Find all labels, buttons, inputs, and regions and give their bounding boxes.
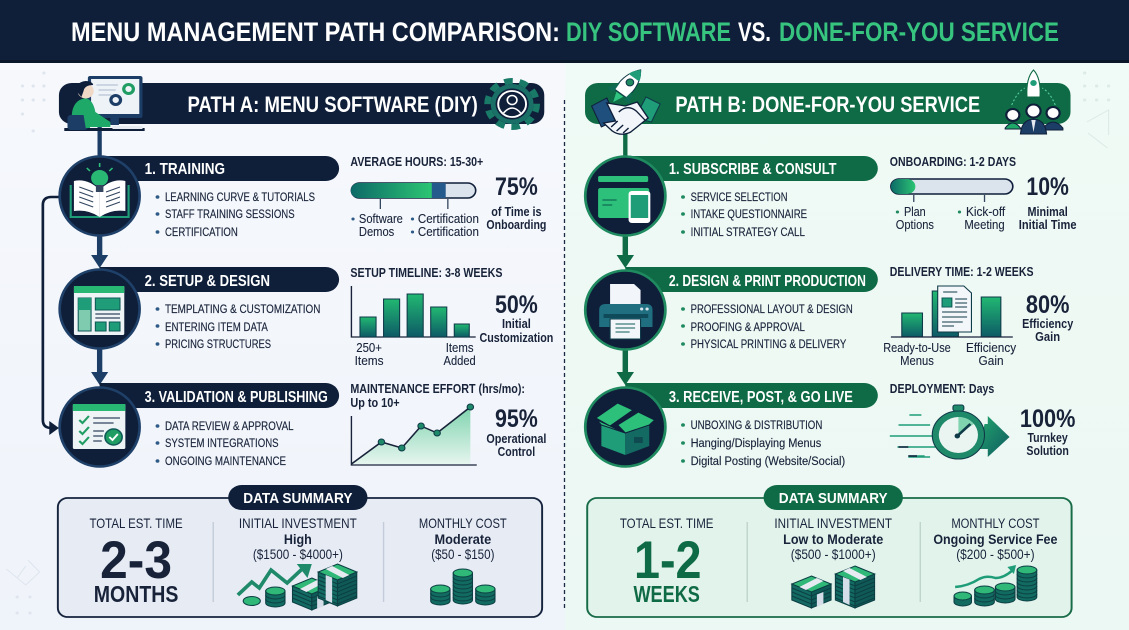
step B1: subscribe and consult	[585, 156, 878, 239]
step A2: setup and design: 2. SETUP & DESIGN	[145, 272, 270, 290]
list: production items: PHYSICAL PRINTING & DELIVERY	[691, 337, 847, 351]
stat: 50 percent: Initial	[502, 316, 531, 331]
path B banner	[585, 83, 1071, 124]
title bar: DONE-FOR-YOU SERVICE	[779, 17, 1059, 47]
list: subscribe items: SERVICE SELECTION	[691, 190, 787, 204]
icon: page template	[74, 286, 124, 335]
step A3: validation and publishing: 3. VALIDATION & PUBLISHING	[145, 388, 328, 406]
chart: average hours progress bar	[350, 154, 483, 239]
chart: setup timeline bars: Items	[446, 340, 474, 355]
list: go-live items: Digital Posting (Website/Social)	[691, 454, 845, 468]
panel: Path B	[585, 62, 1077, 617]
list: setup items: PRICING STRUCTURES	[165, 337, 271, 351]
stat: 95 percent: Operational	[486, 431, 546, 446]
panel: Path A	[43, 76, 553, 617]
chart: average hours progress bar: Certification	[418, 211, 479, 226]
step B1: subscribe and consult: 1. SUBSCRIBE & CONSULT	[669, 160, 837, 178]
stat: 95 percent	[486, 406, 546, 459]
stat: 95 percent: Control	[498, 444, 535, 459]
list: validation items: SYSTEM INTEGRATIONS	[165, 436, 279, 450]
stat: 50 percent	[479, 292, 553, 345]
summary: total time: TOTAL EST. TIME	[89, 516, 183, 532]
chart: setup timeline bars: SETUP TIMELINE: 3-8 WEEKS	[350, 265, 502, 280]
stat: 75 percent: 75%	[495, 174, 538, 201]
stat: 75 percent: of Time is	[491, 204, 542, 219]
icon: handshake	[592, 97, 660, 134]
chart: setup timeline bars	[350, 265, 502, 368]
summary: initial investment: INITIAL INVESTMENT	[239, 516, 357, 532]
icon: card and phone	[598, 176, 650, 223]
title bar	[0, 0, 1129, 63]
summary: total time: TOTAL EST. TIME	[620, 517, 714, 532]
step B2: design and print	[585, 267, 878, 351]
divider between paths	[564, 100, 566, 608]
panel: data summary A	[58, 485, 542, 617]
list: production items: PROFESSIONAL LAYOUT & DESIGN	[691, 302, 853, 316]
stat: 100 percent: 100%	[1020, 404, 1075, 433]
chart: average hours progress bar: AVERAGE HOURS: 15-30+	[350, 154, 483, 169]
chart: delivery time bars with document: Menus	[900, 354, 934, 368]
summary: monthly cost: Moderate	[434, 532, 491, 548]
chart: deployment stopwatch	[890, 382, 1010, 459]
summary: total time: 1-2	[634, 530, 702, 589]
summary: monthly cost	[933, 517, 1057, 562]
stat: 10 percent: 10%	[1026, 172, 1069, 201]
summary: total time: MONTHS	[94, 582, 178, 608]
step A3: validation and publishing	[60, 383, 339, 468]
step A1: training	[60, 156, 339, 239]
icon: person at computer	[64, 76, 145, 131]
icon: open box	[596, 403, 655, 455]
icon: checklist	[73, 404, 125, 449]
list: production items: PROOFING & APPROVAL	[691, 320, 805, 334]
stat: 75 percent: Onboarding	[486, 217, 546, 232]
stat: 10 percent: Minimal	[1028, 205, 1068, 219]
summary: total time: WEEKS	[633, 582, 700, 608]
list: validation items: DATA REVIEW & APPROVAL	[165, 419, 294, 433]
summary: initial investment: ($500 - $1000+)	[791, 547, 876, 562]
stat: 100 percent	[1020, 404, 1075, 458]
icon: coin stacks	[431, 569, 495, 605]
pill: data summary A	[228, 485, 367, 510]
path B flow arrows	[617, 125, 634, 385]
summary: monthly cost: Ongoing Service Fee	[933, 533, 1057, 548]
chart: deployment stopwatch: DEPLOYMENT: Days	[890, 382, 994, 396]
list: training items: STAFF TRAINING SESSIONS	[165, 207, 295, 221]
icon: growing coin stacks with arrow	[954, 565, 1037, 606]
stat: 10 percent: Initial Time	[1019, 218, 1077, 232]
path A banner: PATH A: MENU SOFTWARE (DIY)	[187, 92, 478, 117]
summary: monthly cost: MONTHLY COST	[951, 517, 1040, 532]
summary: initial investment: ($1500 - $4000+)	[253, 546, 343, 562]
stat: 95 percent: 95%	[495, 406, 538, 433]
stat: 75 percent	[486, 174, 546, 232]
panel: data summary B	[587, 485, 1072, 617]
step A2: setup and design	[60, 267, 339, 351]
stat: 50 percent: 50%	[495, 292, 538, 319]
title bar: VS.	[738, 17, 771, 47]
list: go-live items: UNBOXING & DISTRIBUTION	[691, 418, 822, 432]
path A connector: left loop arrow	[43, 197, 59, 435]
list: subscribe items: INITIAL STRATEGY CALL	[691, 225, 805, 239]
summary: initial investment: INITIAL INVESTMENT	[774, 517, 892, 532]
list: go-live items	[681, 418, 845, 468]
icon: gear with user	[487, 81, 537, 127]
pill: data summary B: DATA SUMMARY	[779, 491, 888, 507]
list: go-live items: Hanging/Displaying Menus	[691, 436, 821, 450]
chart: onboarding progress bar	[890, 155, 1016, 232]
icon: team with rocket	[1005, 70, 1063, 134]
list: production items	[681, 302, 853, 351]
icon: open book with bulb	[71, 163, 129, 217]
summary: initial investment: High	[284, 532, 312, 548]
summary: monthly cost: ($200 - $500+)	[956, 547, 1035, 562]
chart: maintenance effort line: Up to 10+	[350, 395, 400, 410]
summary: initial investment	[239, 516, 357, 562]
summary: monthly cost: MONTHLY COST	[419, 516, 507, 532]
list: setup items: TEMPLATING & CUSTOMIZATION	[165, 302, 320, 316]
step A1: training: 1. TRAINING	[145, 160, 225, 178]
list: subscribe items	[681, 190, 807, 239]
chart: onboarding progress bar: Options	[896, 218, 934, 232]
list: training items	[156, 190, 315, 239]
list: validation items: ONGOING MAINTENANCE	[165, 454, 286, 468]
step B3: receive, post, go live	[585, 383, 878, 468]
chart: setup timeline bars: 250+	[356, 340, 382, 355]
pill: data summary A: DATA SUMMARY	[243, 490, 352, 507]
step B3: receive, post, go live: 3. RECEIVE, POST, & GO LIVE	[669, 388, 853, 406]
stat: 80 percent: Gain	[1035, 330, 1060, 344]
stat: 100 percent: Turnkey	[1028, 431, 1068, 445]
stat: 80 percent: Efficiency	[1022, 317, 1074, 331]
chart: delivery time bars with document: Gain	[979, 354, 1004, 368]
chart: maintenance effort line	[350, 381, 525, 465]
title bar: DIY SOFTWARE	[566, 17, 731, 47]
pill: data summary B	[764, 485, 903, 510]
chart: onboarding progress bar: ONBOARDING: 1-2 DAYS	[890, 155, 1016, 169]
chart: maintenance effort line: MAINTENANCE EFFORT (hrs/mo):	[350, 381, 525, 396]
list: training items: LEARNING CURVE & TUTORIALS	[165, 190, 315, 204]
icon: cash stacks	[792, 566, 875, 608]
icon: rocket over banner	[602, 62, 652, 110]
chart: average hours progress bar: Certification	[418, 224, 479, 239]
chart: onboarding progress bar: Plan	[904, 205, 926, 219]
stat: 80 percent	[1022, 290, 1074, 344]
summary: monthly cost: ($50 - $150)	[431, 546, 494, 562]
path A flow arrows	[91, 125, 108, 385]
decorative corner marks right	[1083, 72, 1110, 148]
summary: total time	[620, 517, 714, 608]
stat: 50 percent: Customization	[479, 330, 553, 345]
stat: 100 percent: Solution	[1026, 444, 1069, 458]
list: subscribe items: INTAKE QUESTIONNAIRE	[691, 207, 807, 221]
chart: delivery time bars with document: Ready-to-Use	[883, 341, 951, 355]
summary: initial investment: Low to Moderate	[783, 533, 883, 548]
list: setup items	[156, 302, 320, 351]
list: training items: CERTIFICATION	[165, 225, 238, 239]
icon: growth arrow, coins and cash	[238, 564, 357, 610]
list: validation items	[156, 419, 294, 468]
title bar: MENU MANAGEMENT PATH COMPARISON:	[71, 17, 560, 47]
stat: 10 percent	[1019, 172, 1077, 232]
path A banner	[59, 83, 544, 124]
step B2: design and print: 2. DESIGN & PRINT PRODUCTION	[669, 272, 866, 290]
list: setup items: ENTERING ITEM DATA	[165, 320, 268, 334]
summary: total time	[89, 516, 183, 608]
path B banner: PATH B: DONE-FOR-YOU SERVICE	[675, 92, 980, 117]
summary: initial investment	[774, 517, 892, 562]
chart: delivery time bars with document: Efficiency	[966, 341, 1016, 355]
icon: printer	[599, 284, 653, 339]
chart: delivery time bars with document	[883, 265, 1033, 368]
chart: onboarding progress bar: Meeting	[964, 218, 1005, 232]
decorative corner dots	[6, 72, 46, 614]
summary: monthly cost	[419, 516, 507, 562]
summary: total time: 2-3	[100, 530, 172, 590]
chart: onboarding progress bar: Kick-off	[966, 205, 1005, 219]
chart: setup timeline bars: Added	[444, 353, 476, 368]
chart: setup timeline bars: Items	[355, 353, 384, 368]
chart: delivery time bars with document: DELIVERY TIME: 1-2 WEEKS	[890, 265, 1033, 279]
stat: 80 percent: 80%	[1026, 290, 1069, 319]
chart: average hours progress bar: Software	[359, 211, 403, 226]
chart: average hours progress bar: Demos	[359, 224, 394, 239]
